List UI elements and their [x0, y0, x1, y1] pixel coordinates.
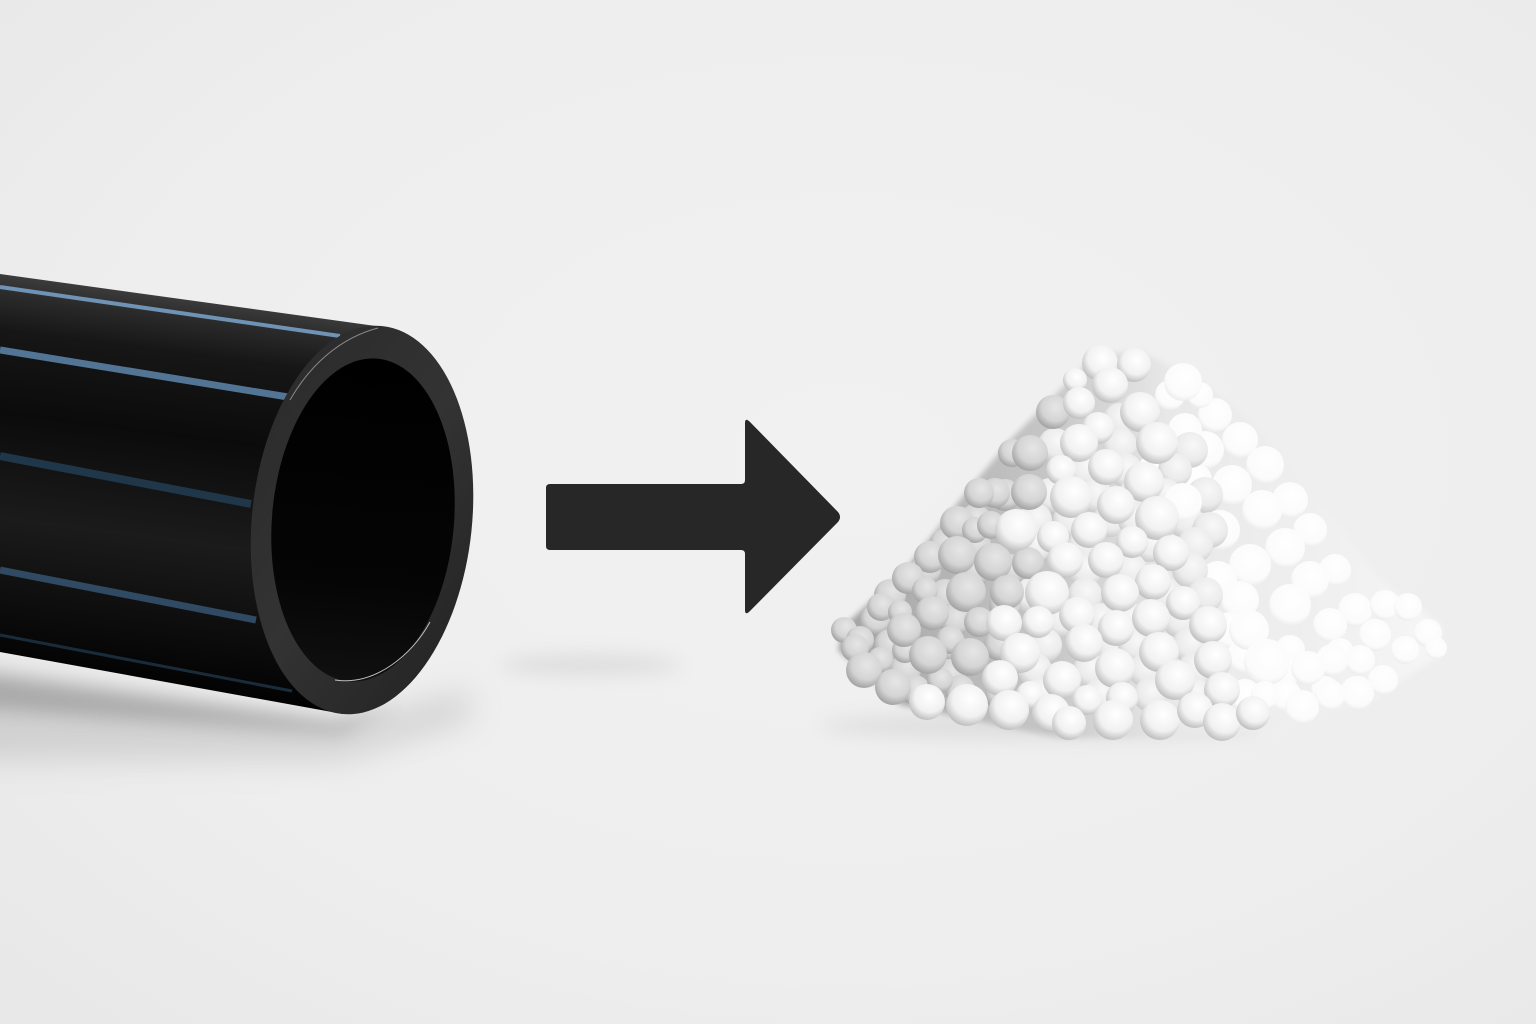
shadow under pipe and arrow [0, 655, 680, 760]
middle layer pellets [1013, 403, 1228, 712]
pipe opening [258, 351, 468, 689]
pile ground shadow [820, 713, 1260, 739]
pipe end ring [232, 315, 492, 725]
center pellets [909, 345, 1348, 741]
pipe rim highlight [290, 328, 378, 400]
pipe [0, 274, 492, 725]
right bright pellets [1138, 380, 1447, 711]
inner rim highlight [335, 622, 430, 681]
grey back-layer pellets [831, 395, 1070, 710]
pipe body [0, 274, 383, 714]
pile base mass [838, 352, 1440, 738]
pile of white pellets [820, 345, 1447, 741]
pipe blue stripes [0, 287, 340, 691]
arrow [546, 420, 840, 613]
